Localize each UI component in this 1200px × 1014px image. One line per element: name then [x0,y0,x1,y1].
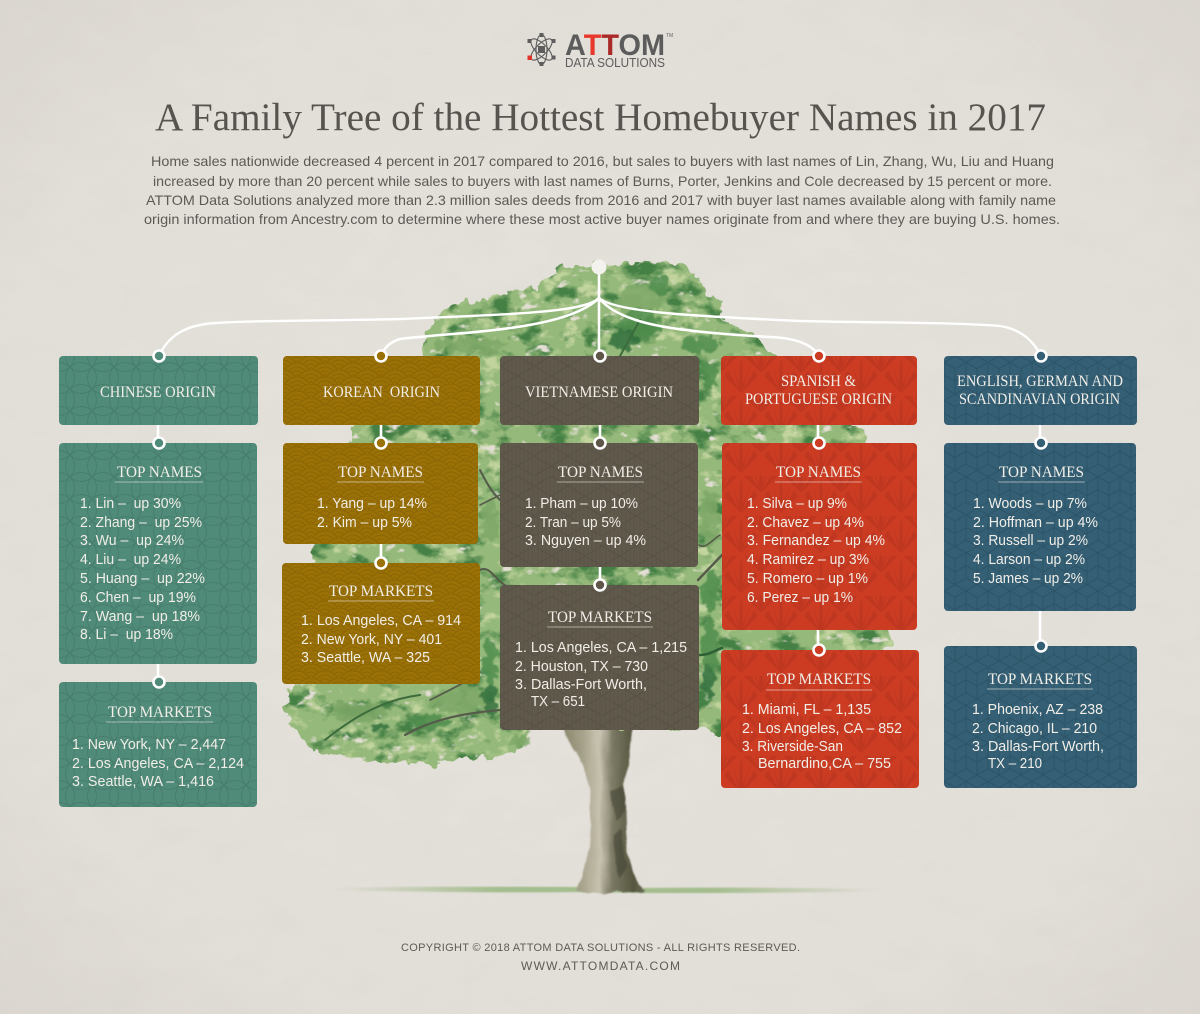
Korean top names box: TOP NAMES [338,464,423,481]
English top names box: TOP NAMES [999,464,1084,481]
English top names box: 2. Hoffman – up 4% [973,515,1098,531]
English, German and Scandinavian origin header box: SCANDINAVIAN ORIGIN [959,391,1120,408]
Korean top markets box: 3. Seattle, WA – 325 [301,650,430,666]
English top names box: 5. James – up 2% [973,571,1083,587]
Spanish top names box [722,443,917,630]
Chinese origin header box: CHINESE ORIGIN [100,384,216,401]
logo wordmark: ATTOM [565,29,665,62]
English top markets box: 2. Chicago, IL – 210 [972,721,1097,737]
icon: atom logo mark [528,33,556,66]
intro paragraph [144,154,1060,227]
Vietnamese top markets box: TX – 651 [531,694,585,710]
title: A Family Tree of the Hottest Homebuyer Names in 2017 [155,95,1046,139]
Vietnamese top markets box [500,585,699,730]
Vietnamese top markets box: TOP MARKETS [548,609,652,626]
Korean origin header box: KOREAN ORIGIN [323,384,440,401]
Vietnamese top markets box: 3. Dallas-Fort Worth, [515,677,647,693]
English top markets box: 3. Dallas-Fort Worth, [972,739,1104,755]
Vietnamese top markets box: 2. Houston, TX – 730 [515,659,648,675]
Korean top markets box: 2. New York, NY – 401 [301,632,442,648]
Chinese top names box: 7. Wang – up 18% [80,609,200,625]
English top markets box [944,646,1137,788]
tree canopy base [285,262,890,764]
Chinese top markets box: 3. Seattle, WA – 1,416 [72,774,214,790]
tree trunk [563,728,645,893]
Korean origin header box [283,356,480,425]
Spanish top names box: 6. Perez – up 1% [747,590,853,606]
Chinese top names box: 5. Huang – up 22% [80,571,205,587]
Spanish top names box: 4. Ramirez – up 3% [747,552,869,568]
Chinese top names box: TOP NAMES [117,464,202,481]
Spanish top names box: 5. Romero – up 1% [747,571,868,587]
Vietnamese origin header box: VIETNAMESE ORIGIN [525,384,673,401]
panel: Spanish and Portuguese origin [721,356,919,788]
panel: Korean origin [282,356,480,684]
tree canopy shading [334,274,720,747]
Chinese top names box: 4. Liu – up 24% [80,552,181,568]
English top markets box: TOP MARKETS [988,671,1092,688]
Vietnamese top names box: 1. Pham – up 10% [525,496,638,512]
intro paragraph: Home sales nationwide decreased 4 percent in 2017 compared to 2016, but sales to buyers with last names of Lin, Zhang, Wu, Liu and Huang [151,154,1054,169]
panel: English, German and Scandinavian origin [944,356,1137,788]
Vietnamese top names box: 3. Nguyen – up 4% [525,533,646,549]
Vietnamese top names box: TOP NAMES [558,464,643,481]
intro paragraph: increased by more than 20 percent while sales to buyers with last names of Burns, Porter, Jenkins and Cole decreased by 15 percent or more. [153,174,1052,189]
connector root node [592,260,606,274]
Spanish top markets box: TOP MARKETS [767,671,871,688]
English top names box: 1. Woods – up 7% [973,496,1087,512]
intro paragraph: origin information from Ancestry.com to determine where these most active buyer names originate from and where they are buying U.S. homes. [144,212,1060,227]
Spanish top markets box: Bernardino,CA – 755 [758,756,891,772]
Vietnamese origin header box [500,356,699,425]
English, German and Scandinavian origin header box [944,356,1137,425]
Chinese top markets box: 1. New York, NY – 2,447 [72,737,226,753]
Korean top names box: 1. Yang – up 14% [317,496,427,512]
Chinese top markets box [59,682,257,807]
Spanish and Portuguese origin header box: PORTUGUESE ORIGIN [745,391,892,408]
Spanish top markets box: 2. Los Angeles, CA – 852 [742,721,902,737]
Spanish top names box: 3. Fernandez – up 4% [747,533,885,549]
Korean top markets box: 1. Los Angeles, CA – 914 [301,613,461,629]
Chinese top markets box: 2. Los Angeles, CA – 2,124 [72,756,244,772]
English top names box: 3. Russell – up 2% [973,533,1088,549]
footer website: WWW.ATTOMDATA.COM [521,959,680,973]
Korean top markets box: TOP MARKETS [329,583,433,600]
Vietnamese top names box [500,443,698,567]
Spanish top markets box [721,650,919,788]
tree branches [325,320,722,740]
Spanish top markets box: 3. Riverside-San [742,739,843,755]
intro paragraph: ATTOM Data Solutions analyzed more than 2.3 million sales deeds from 2016 and 2017 with buyer last names available along with family name [146,193,1056,208]
Korean top names box: 2. Kim – up 5% [317,515,412,531]
Chinese top names box [59,443,257,664]
tree bark marks [610,786,627,880]
Chinese top names box: 1. Lin – up 30% [80,496,181,512]
logo tagline: DATA SOLUTIONS [565,56,665,70]
Chinese origin header box [59,356,258,425]
English top names box [944,443,1136,611]
Korean top markets box [282,563,480,684]
English, German and Scandinavian origin header box: ENGLISH, GERMAN AND [957,373,1123,390]
connector nodes and stems between boxes [154,350,1046,688]
footer copyright: COPYRIGHT © 2018 ATTOM DATA SOLUTIONS - ALL RIGHTS RESERVED. [401,942,800,954]
Korean top names box [283,443,478,544]
Chinese top markets box: TOP MARKETS [108,704,212,721]
Vietnamese top names box: 2. Tran – up 5% [525,515,621,531]
Vietnamese top markets box: 1. Los Angeles, CA – 1,215 [515,640,687,656]
connector tree lines [159,270,1041,356]
Spanish top names box: 2. Chavez – up 4% [747,515,864,531]
English top markets box: TX – 210 [988,756,1042,772]
Spanish and Portuguese origin header box: SPANISH & [781,373,856,390]
logo trademark: TM [666,33,673,39]
panel: Vietnamese origin [500,356,699,730]
Chinese top names box: 2. Zhang – up 25% [80,515,202,531]
Spanish top names box: TOP NAMES [776,464,861,481]
English top names box: 4. Larson – up 2% [973,552,1085,568]
Chinese top names box: 6. Chen – up 19% [80,590,196,606]
Chinese top names box: 3. Wu – up 24% [80,533,184,549]
English top markets box: 1. Phoenix, AZ – 238 [972,702,1103,718]
Spanish top names box: 1. Silva – up 9% [747,496,847,512]
Spanish top markets box: 1. Miami, FL – 1,135 [742,702,871,718]
Chinese top names box: 8. Li – up 18% [80,627,173,643]
tree ground line [330,887,880,893]
logo [528,29,673,70]
Spanish and Portuguese origin header box [721,356,917,425]
panel: Chinese origin [59,356,258,807]
illustration: watercolor tree [285,262,890,893]
